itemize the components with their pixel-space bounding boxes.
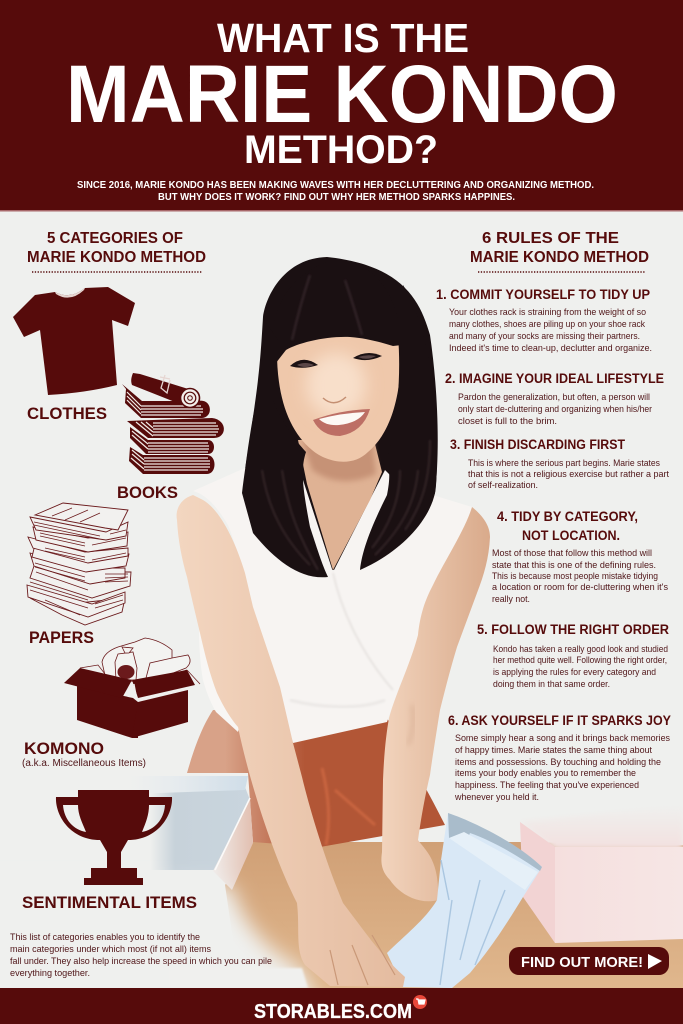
rule 6: items and possessions. By touching and holding the <box>455 756 661 767</box>
hair left front <box>242 320 328 577</box>
left hand fingers <box>330 935 395 985</box>
table <box>225 842 683 988</box>
rule 1: 1. COMMIT YOURSELF TO TIDY UP <box>436 287 650 302</box>
rule 1: Your clothes rack is straining from the weight of so <box>449 306 646 317</box>
icon: cart badge <box>413 995 427 1009</box>
intro text: BUT WHY DOES IT WORK? FIND OUT WHY HER METHOD SPARKS HAPPINES. <box>158 191 515 203</box>
right eye <box>353 353 382 360</box>
rule 1: and many of your socks are missing their partners. <box>449 330 640 341</box>
footer <box>0 988 683 1024</box>
icon: stack of papers <box>27 503 131 625</box>
rule 5 <box>477 622 669 689</box>
shirt back sliver <box>199 630 262 732</box>
rule 6: items your body enables you to remember the <box>455 767 636 778</box>
bangs highlight <box>292 275 362 340</box>
rule 1: many clothes, shoes are piling up on your shoe rack <box>449 318 645 329</box>
shirt <box>193 467 472 743</box>
rule 3 <box>450 437 669 490</box>
rule 4: state that this is one of the defining rules. <box>492 559 656 570</box>
box body left <box>77 686 138 738</box>
book pages <box>127 392 219 470</box>
icon: box of komono <box>64 638 200 738</box>
rule 6: whenever you held it. <box>454 791 539 802</box>
categories summary: everything together. <box>10 967 90 978</box>
scroll string <box>160 375 170 393</box>
icon: trophy <box>56 790 172 885</box>
rule 3: of self-realization. <box>468 479 538 490</box>
rule 2 <box>445 371 664 426</box>
rule 2: closet is full to the brim. <box>458 415 557 426</box>
rule 5: doing them in that same order. <box>493 678 610 689</box>
folded blue cloth <box>387 813 542 988</box>
rule 2: 2. IMAGINE YOUR IDEAL LIFESTYLE <box>445 371 664 386</box>
rule 3: This is where the serious part begins. Marie states <box>468 457 660 468</box>
button: find out more <box>509 947 669 975</box>
panel: 5 categories <box>10 230 272 978</box>
rule 6 <box>448 713 671 802</box>
icon: t-shirt <box>13 287 135 395</box>
left storage box and cloth <box>130 776 253 890</box>
intro text: SINCE 2016, MARIE KONDO HAS BEEN MAKING WAVES WITH HER DECLUTTERING AND ORGANIZING METHOD. <box>77 179 594 191</box>
title: METHOD? <box>244 128 438 172</box>
box contents <box>102 638 190 682</box>
label: books: BOOKS <box>117 484 178 502</box>
label: sentimental items: SENTIMENTAL ITEMS <box>22 894 197 912</box>
categories summary <box>10 931 272 978</box>
label: clothes: CLOTHES <box>27 405 107 423</box>
box body right <box>132 690 188 738</box>
left eye <box>290 360 318 368</box>
hair strands <box>262 440 430 570</box>
title: MARIE KONDO <box>66 49 618 140</box>
scroll <box>131 373 198 404</box>
right storage box <box>520 805 683 943</box>
hair back <box>242 257 438 572</box>
back flaps <box>80 665 200 684</box>
panel: 6 rules <box>436 230 671 802</box>
categories summary: This list of categories enables you to identify the <box>10 931 200 942</box>
teeth <box>319 412 365 425</box>
heading: rules: MARIE KONDO METHOD <box>470 249 649 266</box>
label: komono: KOMONO <box>24 740 104 758</box>
heading: categories: 5 CATEGORIES OF <box>47 230 183 247</box>
title <box>66 15 618 172</box>
rule 4: Most of those that follow this method will <box>492 547 652 558</box>
rule 2: only start de-cluttering and organizing when his/her <box>458 403 652 414</box>
neck and chest <box>298 440 382 570</box>
box flap right <box>132 670 195 698</box>
skirt <box>187 710 445 847</box>
rule 2: Pardon the generalization, but often, a person will <box>458 391 650 402</box>
categories summary: fall under. They also help increase the speed in which you can pile <box>10 955 272 966</box>
background <box>0 210 683 990</box>
rule 6: Some simply hear a song and it brings back memories <box>455 732 670 743</box>
title: WHAT IS THE <box>217 15 469 61</box>
rule 1: Indeed it's time to clean-up, declutter and organize. <box>449 342 652 353</box>
flap highlight <box>134 684 188 700</box>
rule 3: that this is not a religious exercise but rather a part <box>468 468 669 479</box>
neck shadow <box>302 440 376 481</box>
mouth <box>313 409 370 436</box>
right arm and hand <box>381 507 490 901</box>
rule 4: NOT LOCATION. <box>522 528 620 543</box>
arm crease <box>408 705 413 745</box>
intro text <box>77 179 594 203</box>
jar flowers <box>118 665 134 679</box>
rule 4: 4. TIDY BY CATEGORY, <box>497 509 638 524</box>
footer brand: STORABLES.COM <box>254 1000 412 1023</box>
under-hand sheet <box>170 968 308 988</box>
skirt folds <box>322 768 375 845</box>
hair right front <box>360 285 437 570</box>
rule 5: is applying the rules for every category and <box>493 666 656 677</box>
rule 4 <box>492 509 668 604</box>
left fade to white <box>0 885 320 1010</box>
label: papers: PAPERS <box>29 629 94 647</box>
rule 4: a location or room for de-cluttering when it's <box>492 581 668 592</box>
rule 5: 5. FOLLOW THE RIGHT ORDER <box>477 622 669 637</box>
icon: books and scroll <box>122 373 224 474</box>
rule 6: of happy times. Marie states the same thing about <box>455 744 652 755</box>
header band <box>0 0 683 212</box>
heading: rules: 6 RULES OF THE <box>482 230 619 247</box>
label: komono <box>22 740 146 769</box>
nose <box>323 397 346 403</box>
heading: categories: MARIE KONDO METHOD <box>27 249 206 266</box>
rule 1 <box>436 287 652 353</box>
bangs <box>271 261 402 368</box>
categories summary: main categories under which most (if not all) items <box>10 943 211 954</box>
rule 4: This is because most people mistake tidying <box>492 570 658 581</box>
left arm <box>177 495 405 987</box>
rule 3: 3. FINISH DISCARDING FIRST <box>450 437 626 452</box>
box flap left <box>64 668 132 698</box>
book covers <box>122 384 224 474</box>
button: find out more: FIND OUT MORE! <box>521 954 643 971</box>
photo: Marie Kondo at a table <box>0 257 683 1010</box>
label: komono: (a.k.a. Miscellaneous Items) <box>22 758 146 769</box>
heading: categories <box>27 230 206 272</box>
rule 6: 6. ASK YOURSELF IF IT SPARKS JOY <box>448 713 671 728</box>
rule 6: happiness. The feeling that you've experienced <box>455 779 639 790</box>
rule 4: really not. <box>492 593 530 604</box>
face <box>277 326 401 462</box>
heading: rules <box>470 230 649 272</box>
